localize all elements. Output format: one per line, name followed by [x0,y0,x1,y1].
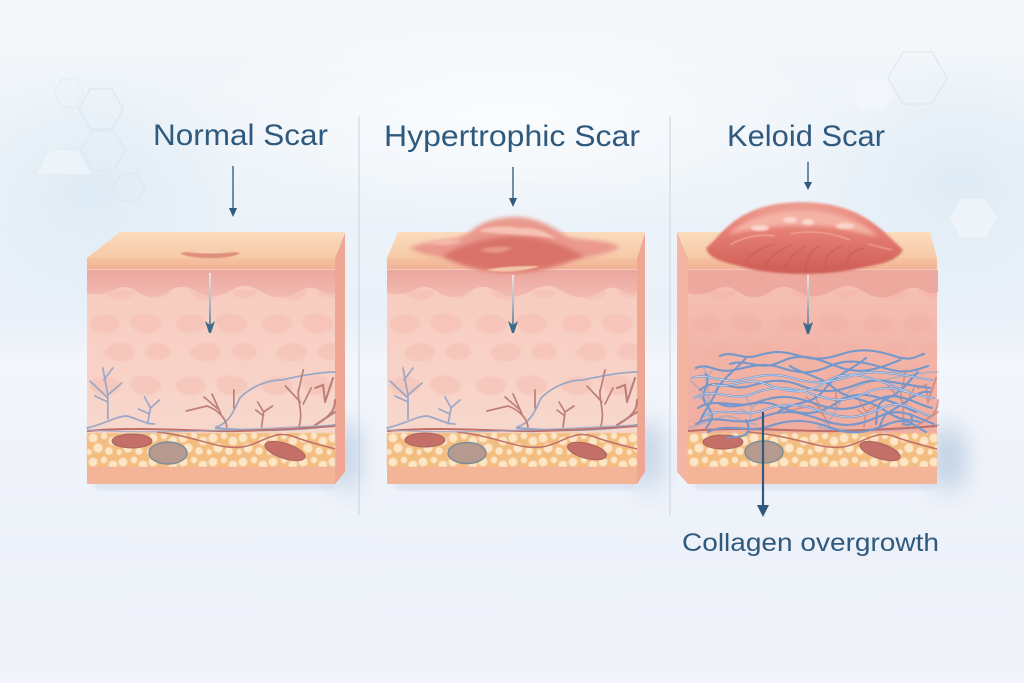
block shadow [930,424,966,492]
arrow: into dermis [205,273,215,333]
blood vessels [87,368,335,430]
arrow: keloid scar title [804,162,812,190]
scar depression [180,251,240,258]
hexagon decoration: left [37,79,145,201]
right side face [637,233,645,484]
hexagon decoration: right [853,52,997,238]
arrow: hypertrophic scar title [509,167,517,207]
divider: left [358,116,360,515]
label: collagen overgrowth: Collagen overgrowth [682,529,939,557]
fat layer [87,433,335,467]
arrow: normal scar title [229,166,237,217]
title: keloid scar: Keloid Scar [727,120,885,153]
front layers [87,258,335,484]
raised scar [410,217,620,273]
collagen overgrowth fibres [692,350,934,438]
divider: right [669,116,671,515]
top surface [387,232,645,258]
panel: hypertrophic scar skin block [387,217,662,491]
fat vessels ovals [112,434,152,448]
left side face [677,232,688,484]
right side face [335,233,345,484]
title: hypertrophic scar: Hypertrophic Scar [384,120,640,153]
block shadow [634,419,662,491]
title: normal scar: Normal Scar [153,119,328,152]
raised keloid mass [706,202,903,274]
arrow: collagen overgrowth callout [757,412,769,517]
top surface [87,232,345,258]
panel: keloid scar skin block [677,202,966,492]
panel: normal scar skin block [87,232,360,491]
top surface [677,232,937,258]
bottom band [87,467,335,484]
arrow: into dermis [803,275,813,334]
arrow: into dermis [508,275,518,333]
block shadow [332,419,360,491]
